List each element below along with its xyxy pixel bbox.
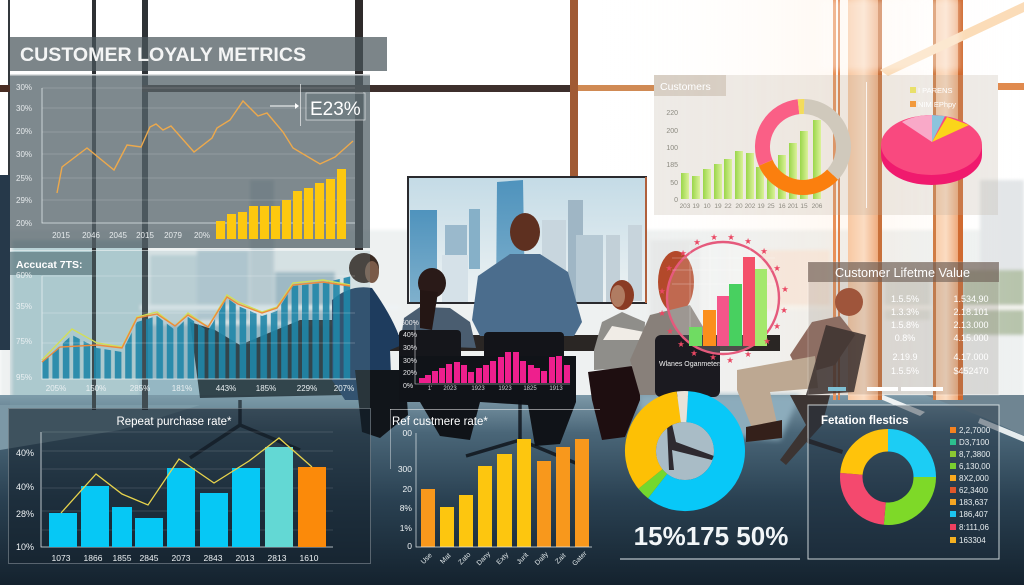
heading: Customer Lifetme Value (835, 266, 970, 280)
panel: customers: 22 (724, 203, 732, 210)
panel: ref customer rate: Gater (571, 550, 589, 568)
bars (49, 447, 326, 547)
y axis labels (16, 83, 32, 228)
table values: 2.19.9 (892, 352, 918, 362)
meeting table (370, 335, 780, 351)
axis labels: 1610 (300, 553, 319, 563)
axis labels: 75% (16, 337, 32, 346)
x axis labels: 2015 (52, 231, 70, 240)
table values: 1.5.8% (891, 320, 919, 330)
legend: 62,3400 (959, 486, 988, 495)
yellow line (42, 280, 350, 360)
panel: ref customer rate: Use (420, 552, 434, 566)
panel: customers: 203 (680, 203, 691, 210)
y axis labels: 20% (16, 219, 32, 228)
axis labels: 200 (666, 128, 678, 135)
chart: pink bars over chair: 40% (403, 332, 417, 339)
legend (910, 86, 956, 109)
heading: Ref custmere rate* (392, 416, 488, 428)
axis labels (16, 448, 319, 563)
axis labels: 207% (334, 384, 354, 393)
axis labels: 1073 (52, 553, 71, 563)
table values: 1.534,90 (953, 294, 989, 304)
star ring: ★ (666, 326, 674, 336)
title band: CUSTOMER LOYALY METRICS (20, 44, 306, 66)
legend: D3,7100 (959, 438, 990, 447)
panel heading (10, 252, 92, 275)
axis labels: 229% (297, 384, 317, 393)
x axis labels: 2045 (109, 231, 127, 240)
panel heading: Accucat 7TS: (16, 259, 83, 271)
3D pie chart (881, 115, 982, 185)
panel: customers: 19 (692, 203, 700, 210)
axis labels: 40% (16, 448, 34, 458)
heading (654, 75, 726, 96)
axis labels: 50 (670, 180, 678, 187)
axis labels: 1855 (113, 553, 132, 563)
star ring: ★ (693, 237, 701, 247)
star ring: ★ (744, 349, 752, 359)
star ring: ★ (780, 305, 788, 315)
panel: customers: 19 (757, 203, 765, 210)
panel: ref customer rate: Daily (534, 551, 550, 567)
y axis labels: 30% (16, 150, 32, 159)
axis labels: 220 (666, 110, 678, 117)
panel: customers: 15 (800, 203, 808, 210)
legend (950, 426, 991, 545)
panel: customers (654, 75, 998, 215)
chart: pink bars over chair (401, 320, 570, 392)
legend: 163304 (959, 536, 986, 545)
big donut with percentages (620, 407, 800, 560)
y axis labels: 29% (16, 196, 32, 205)
people and meeting table (190, 213, 866, 465)
table values: 2.18.101 (953, 307, 989, 317)
star ring: ★ (658, 286, 666, 296)
panel: presentation screen (408, 177, 647, 303)
star ring: ★ (763, 336, 771, 346)
heading: Repeat purchase rate* (116, 416, 232, 428)
footer bars (828, 387, 943, 391)
axis labels: 181% (172, 384, 192, 393)
table values: 0.8% (895, 333, 915, 343)
panel: customers: 19 (714, 203, 722, 210)
panel: top left line and bar chart (10, 74, 370, 248)
axis labels: 150% (86, 384, 106, 393)
big percentages: 15%175 50% (634, 521, 788, 551)
x axis labels: 2079 (164, 231, 182, 240)
panel: customers: 16 (778, 203, 786, 210)
panel: fetation flestics (808, 405, 999, 559)
star ring: ★ (781, 284, 789, 294)
star ring: ★ (665, 263, 673, 273)
dark chairs and legs under the table (399, 356, 576, 446)
panel: customers: 206 (812, 203, 823, 210)
star ring: ★ (744, 236, 752, 246)
axis labels: 2073 (172, 553, 191, 563)
legend: 8,7,3800 (959, 450, 991, 459)
star ring: ★ (709, 352, 717, 362)
yellow bars (216, 169, 346, 239)
yellow trend line (61, 438, 312, 513)
person: man standing centre (472, 213, 582, 372)
office chair legs (190, 400, 578, 464)
panel: customer lifetime value (808, 262, 999, 395)
axis labels: 205% (46, 384, 66, 393)
axis labels (666, 110, 678, 204)
heading (808, 262, 999, 282)
chart: pink bars over chair: 1' (428, 386, 432, 392)
x axis labels: 20% (194, 231, 210, 240)
axis labels: 100 (666, 145, 678, 152)
star ring: ★ (690, 348, 698, 358)
chart: pink bars over chair: 600% (401, 320, 419, 327)
chart: pink bars over chair: 1923 (471, 386, 485, 392)
axis labels (398, 428, 412, 551)
panel: accumulated line and stripe chart (10, 250, 370, 408)
chart: pink bars over chair: 0% (403, 383, 413, 390)
table values: 2.13.000 (953, 320, 989, 330)
x axis labels (52, 231, 210, 240)
star ring: ★ (726, 355, 734, 365)
star ring (658, 232, 789, 365)
skyline through window (0, 180, 1024, 410)
legend: 8X2,000 (959, 474, 989, 483)
legend: 183,637 (959, 498, 988, 507)
legend: 2,2,7000 (959, 426, 991, 435)
star ring: ★ (679, 248, 687, 258)
axis labels: 60% (16, 271, 32, 280)
window frames (0, 0, 1024, 410)
caption: Wlanes Oganmeters (659, 361, 723, 368)
star ring: ★ (658, 308, 666, 318)
panel: customers: 20 (735, 203, 743, 210)
donut ring (640, 407, 730, 496)
chart: pink bars over chair: 2023 (443, 386, 457, 392)
chart: pink bars over chair: 30% (403, 358, 417, 365)
x axis labels: 2015 (136, 231, 154, 240)
x axis labels: 2046 (82, 231, 100, 240)
panel: ref customer rate: Jurit (516, 552, 530, 566)
panel: customers: 201 (788, 203, 799, 210)
axis labels: 2813 (268, 553, 287, 563)
table values: 1.5.5% (891, 294, 919, 304)
axis labels: 40% (16, 482, 34, 492)
legend: 186,407 (959, 510, 988, 519)
y axis labels: 30% (16, 104, 32, 113)
chart: pink bars over chair: 1923 (498, 386, 512, 392)
title band (10, 37, 387, 71)
chart: circular badge with bars (658, 232, 789, 368)
table values: 1.3.3% (891, 307, 919, 317)
axis labels: 285% (130, 384, 150, 393)
axis labels: 2843 (204, 553, 223, 563)
panel: customers: 202 (745, 203, 756, 210)
dark chair mass behind left panel (190, 320, 345, 398)
heading: Fetation flestics (821, 415, 909, 427)
axis labels: 0 (674, 197, 678, 204)
floor (0, 395, 1024, 585)
axis labels: 95% (16, 373, 32, 382)
person: woman left (399, 268, 476, 370)
legend: I PARENS (918, 86, 952, 95)
person: man seated left (332, 253, 408, 438)
axis labels: 300 (398, 464, 412, 474)
star ring: ★ (773, 321, 781, 331)
table values: 4.17.000 (953, 352, 989, 362)
axis labels: 35% (16, 302, 32, 311)
panel: ref customer rate: Zato (458, 551, 472, 566)
star ring: ★ (773, 263, 781, 273)
orange line (42, 282, 350, 362)
axis labels: 185 (666, 162, 678, 169)
bars (421, 439, 589, 547)
chart: pink bars over chair: 1825 (523, 386, 537, 392)
bars (689, 257, 767, 346)
y axis labels: 30% (16, 83, 32, 92)
table values: 4.15.000 (953, 333, 989, 343)
panel: customers: 25 (767, 203, 775, 210)
axis labels: 20 (403, 484, 412, 494)
axis labels: 443% (216, 384, 236, 393)
heading: Customers (660, 81, 711, 93)
axis labels: 28% (16, 509, 34, 519)
axis labels: 8% (400, 503, 412, 513)
y axis labels: 25% (16, 174, 32, 183)
axis labels (16, 271, 354, 393)
chart: pink bars over chair: 1913 (549, 386, 563, 392)
panel: customers: 10 (703, 203, 711, 210)
donut chart (851, 440, 925, 514)
teal striped bars (42, 276, 352, 379)
y axis labels: 20% (16, 127, 32, 136)
table values: 1.5.5% (891, 366, 919, 376)
green bars (681, 120, 821, 199)
axis labels: 00 (403, 428, 412, 438)
legend: 8:111,06 (959, 523, 990, 532)
axis labels: 10% (16, 542, 34, 552)
panel: ref customer rate: Dany (476, 550, 493, 567)
legend: NIM EPhpy (918, 100, 956, 109)
donut chart (762, 106, 843, 187)
star ring: ★ (677, 339, 685, 349)
panel: ref customer rate (390, 409, 600, 568)
panel: ref customer rate: Exty (496, 551, 511, 566)
axis labels: 185% (256, 384, 276, 393)
star ring: ★ (710, 232, 718, 242)
panel: ref customer rate: Zait (554, 552, 568, 566)
star ring: ★ (760, 246, 768, 256)
axis labels: 2013 (236, 553, 255, 563)
axis labels: 0 (407, 541, 412, 551)
table values (891, 294, 989, 376)
person: man seated right (737, 288, 866, 465)
person: woman seated middle (588, 280, 650, 440)
star ring: ★ (727, 232, 735, 242)
orange trend line (57, 101, 353, 193)
axis labels: 1866 (84, 553, 103, 563)
person: woman seated right (630, 251, 720, 397)
panel: repeat purchase rate (8, 408, 371, 564)
callout: 23 percent: E23% (310, 99, 361, 120)
callout: 23 percent (270, 84, 365, 126)
table values: $452470 (953, 366, 989, 376)
chart: pink bars over chair: 30% (403, 345, 417, 352)
axis labels: 1% (400, 523, 412, 533)
legend: 6,130,00 (959, 462, 991, 471)
donut hole scene (655, 421, 715, 481)
axis labels: 2845 (140, 553, 159, 563)
panel: ref customer rate: Mat (439, 552, 453, 566)
chart: pink bars over chair: 20% (403, 370, 417, 377)
